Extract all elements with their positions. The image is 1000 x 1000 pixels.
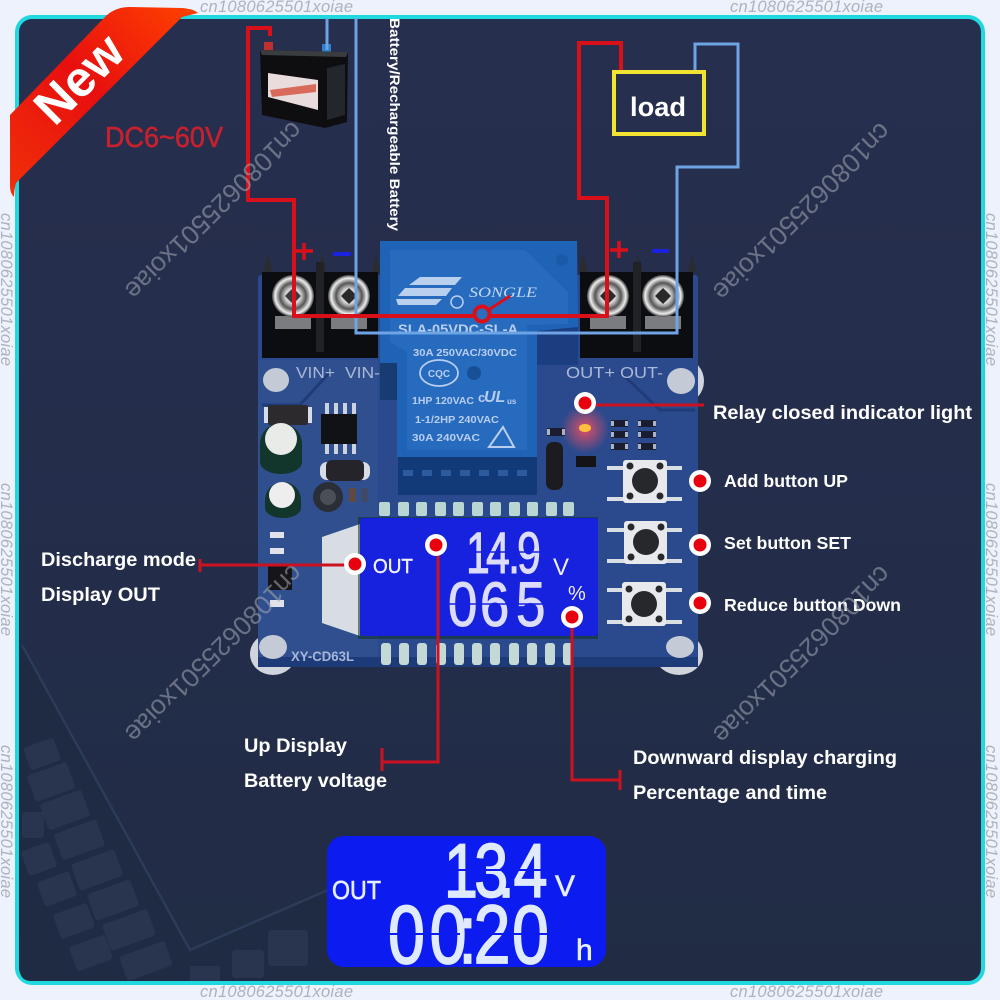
watermarks: diagonal	[119, 116, 897, 750]
icon: car battery	[260, 42, 348, 128]
relay: Songle: us	[507, 397, 517, 406]
relay switch symbol	[474, 306, 490, 322]
lcd pins: bottom row	[381, 643, 573, 665]
pcb board	[258, 275, 698, 667]
callout: set button	[689, 533, 851, 556]
terminal labels: OUT+	[566, 365, 615, 382]
new ribbon: New	[23, 23, 135, 135]
callout: relay indicator: Relay closed indicator light	[713, 402, 973, 424]
watermarks: diagonal: cn1080625501xoiae	[707, 560, 897, 750]
callout: discharge mode	[41, 550, 366, 606]
lower lcd display	[327, 829, 606, 981]
relay: Songle: c	[478, 390, 485, 405]
relay: Songle: CQC	[428, 369, 450, 380]
load box: load	[630, 92, 686, 122]
lower lcd display: h	[576, 934, 593, 967]
callout: set button: Set button SET	[724, 533, 851, 553]
lcd pins: top row	[379, 502, 574, 516]
watermarks: edge text: cn1080625501xoiae	[982, 483, 1000, 636]
relay: Songle	[380, 241, 578, 495]
lower lcd display: 13.4	[444, 829, 547, 914]
board model label: XY-CD63L	[291, 648, 354, 664]
relay: Songle: 1HP 120VAC	[412, 396, 474, 407]
terminal labels: VIN+	[296, 365, 335, 382]
watermarks: diagonal: cn1080625501xoiae	[119, 116, 309, 306]
main lcd display: 14.9	[466, 521, 541, 586]
relay: Songle: SLA-05VDC-SL-A	[398, 322, 518, 337]
terminal labels	[296, 365, 663, 382]
callout: discharge mode: Discharge mode	[41, 550, 196, 571]
relay: Songle: 30A 250VAC/30VDC	[413, 348, 517, 359]
lower lcd display: 00:20	[388, 888, 549, 981]
main lcd display: OUT	[373, 556, 413, 578]
callout: add button	[689, 470, 848, 492]
mounting posts	[259, 368, 695, 659]
callout: charging percentage: Downward display charging	[633, 747, 897, 769]
callout: charging percentage: Percentage and time	[633, 782, 827, 804]
watermarks: edge text: cn1080625501xoiae	[982, 745, 1000, 898]
callout: reduce button: Reduce button Down	[724, 595, 901, 615]
background texture: faint keyboard pattern	[20, 645, 400, 981]
mounting washers behind the board	[250, 359, 704, 675]
watermarks: diagonal: cn1080625501xoiae	[119, 559, 309, 749]
main lcd display: %	[568, 583, 586, 605]
callout: battery voltage: Battery voltage	[244, 770, 387, 792]
terminal labels: VIN-	[345, 365, 380, 382]
main lcd display: 065	[448, 570, 545, 640]
main lcd display: V	[553, 554, 569, 581]
push buttons	[607, 460, 682, 626]
relay: Songle: SONGLE	[469, 285, 537, 301]
main lcd display	[322, 517, 598, 640]
callout: relay indicator	[574, 392, 973, 424]
callout: battery voltage	[244, 534, 447, 792]
relay: Songle: 1-1/2HP 240VAC	[415, 415, 499, 426]
watermarks: edge text: cn1080625501xoiae	[982, 213, 1000, 366]
vertical battery label: Battery/Rechargeable Battery	[387, 18, 403, 231]
terminal block: OUT	[579, 254, 696, 358]
wiring: red positive wire	[248, 28, 621, 316]
wiring: blue negative wire	[327, 18, 738, 333]
load box	[614, 72, 704, 134]
terminal labels: OUT-	[620, 365, 663, 382]
lower lcd display: OUT	[332, 875, 381, 905]
voltage range label: DC6~60V	[105, 122, 224, 154]
lower lcd display: V	[555, 870, 575, 903]
callout: battery voltage: Up Display	[244, 735, 347, 757]
components: capacitors, ic and inductor	[260, 403, 656, 607]
polarity markers	[295, 241, 669, 260]
relay: Songle: 30A 240VAC	[412, 433, 480, 444]
indicator led	[561, 405, 609, 453]
callout: charging percentage	[561, 606, 897, 804]
callout: add button: Add button UP	[724, 471, 848, 491]
relay: Songle: UL	[484, 389, 505, 406]
terminal block: VIN	[262, 254, 380, 358]
new ribbon	[10, 7, 198, 197]
watermarks: diagonal: cn1080625501xoiae	[707, 117, 897, 307]
callout: discharge mode: Display OUT	[41, 585, 160, 606]
